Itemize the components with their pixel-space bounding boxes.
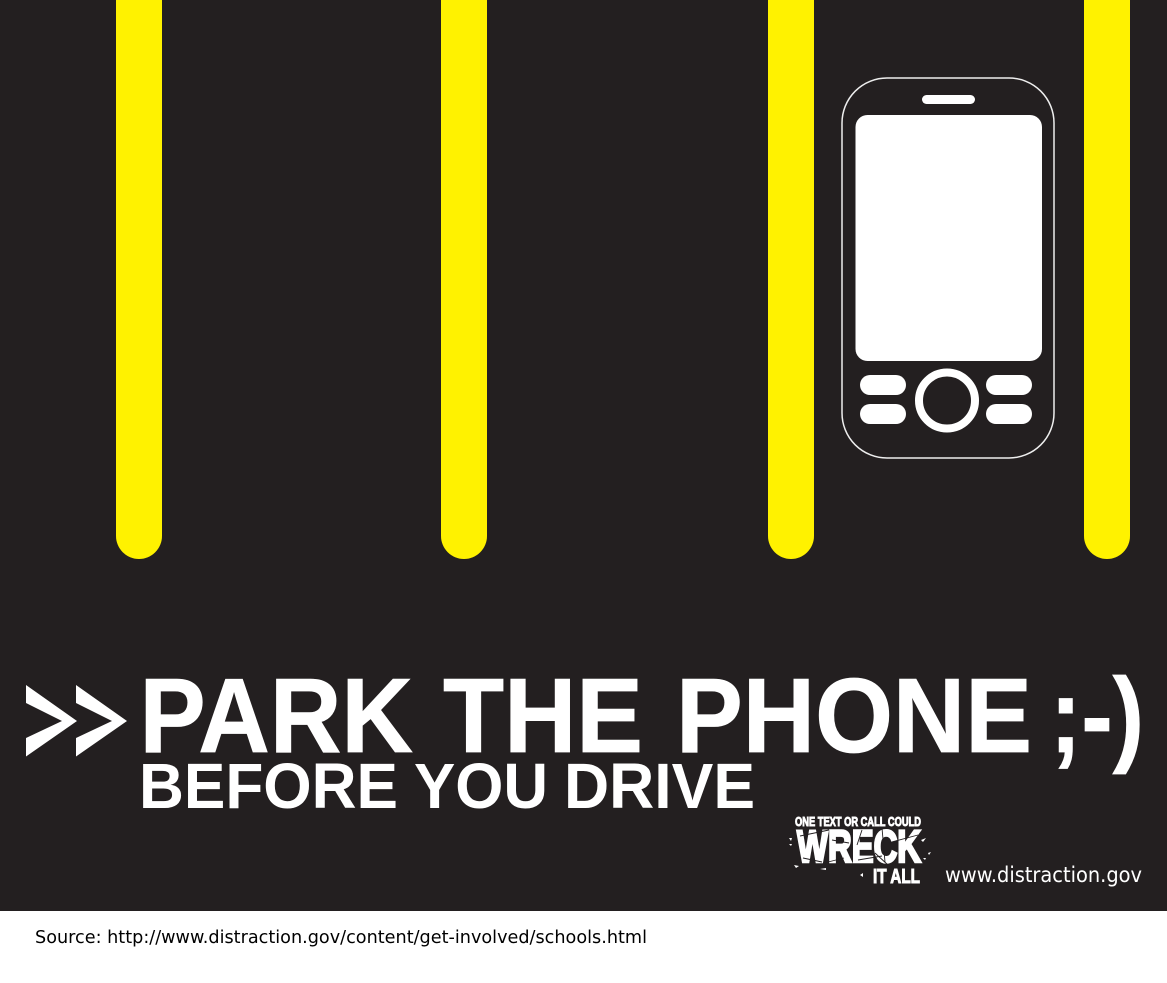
subheadline bbox=[139, 750, 755, 822]
logo wreck word: WRECK bbox=[797, 821, 921, 872]
logo line 1: ONE TEXT OR CALL COULD bbox=[795, 815, 921, 829]
headline: PHONE bbox=[676, 657, 1032, 775]
phone centre ring button bbox=[919, 372, 975, 428]
parking line 3 bbox=[768, 0, 814, 559]
logo cracks bbox=[800, 828, 918, 865]
logo shards bbox=[789, 838, 931, 877]
phone buttons bbox=[860, 375, 1032, 424]
icon: double chevron arrows bbox=[26, 685, 127, 756]
parking line 1 bbox=[116, 0, 162, 559]
phone speaker bbox=[922, 95, 975, 104]
parking line 2 bbox=[441, 0, 487, 559]
headline: PARK bbox=[140, 657, 413, 775]
logo: one text or call could wreck it all bbox=[789, 815, 931, 888]
phone body outline bbox=[842, 78, 1054, 458]
parking lines bbox=[116, 0, 1130, 559]
phone screen bbox=[856, 115, 1042, 361]
headline: ;-) bbox=[1050, 657, 1144, 775]
logo it all: IT ALL bbox=[873, 866, 920, 888]
icon: mobile phone bbox=[842, 78, 1054, 458]
subheadline: BEFORE bbox=[139, 750, 398, 822]
parking line 4 bbox=[1084, 0, 1130, 559]
website url: www.distraction.gov bbox=[945, 863, 1142, 887]
headline bbox=[140, 657, 1144, 775]
subheadline: DRIVE bbox=[564, 750, 755, 822]
subheadline: YOU bbox=[414, 750, 548, 822]
source citation: Source: http://www.distraction.gov/content/get-involved/schools.html bbox=[35, 927, 647, 948]
headline: THE bbox=[443, 657, 643, 775]
